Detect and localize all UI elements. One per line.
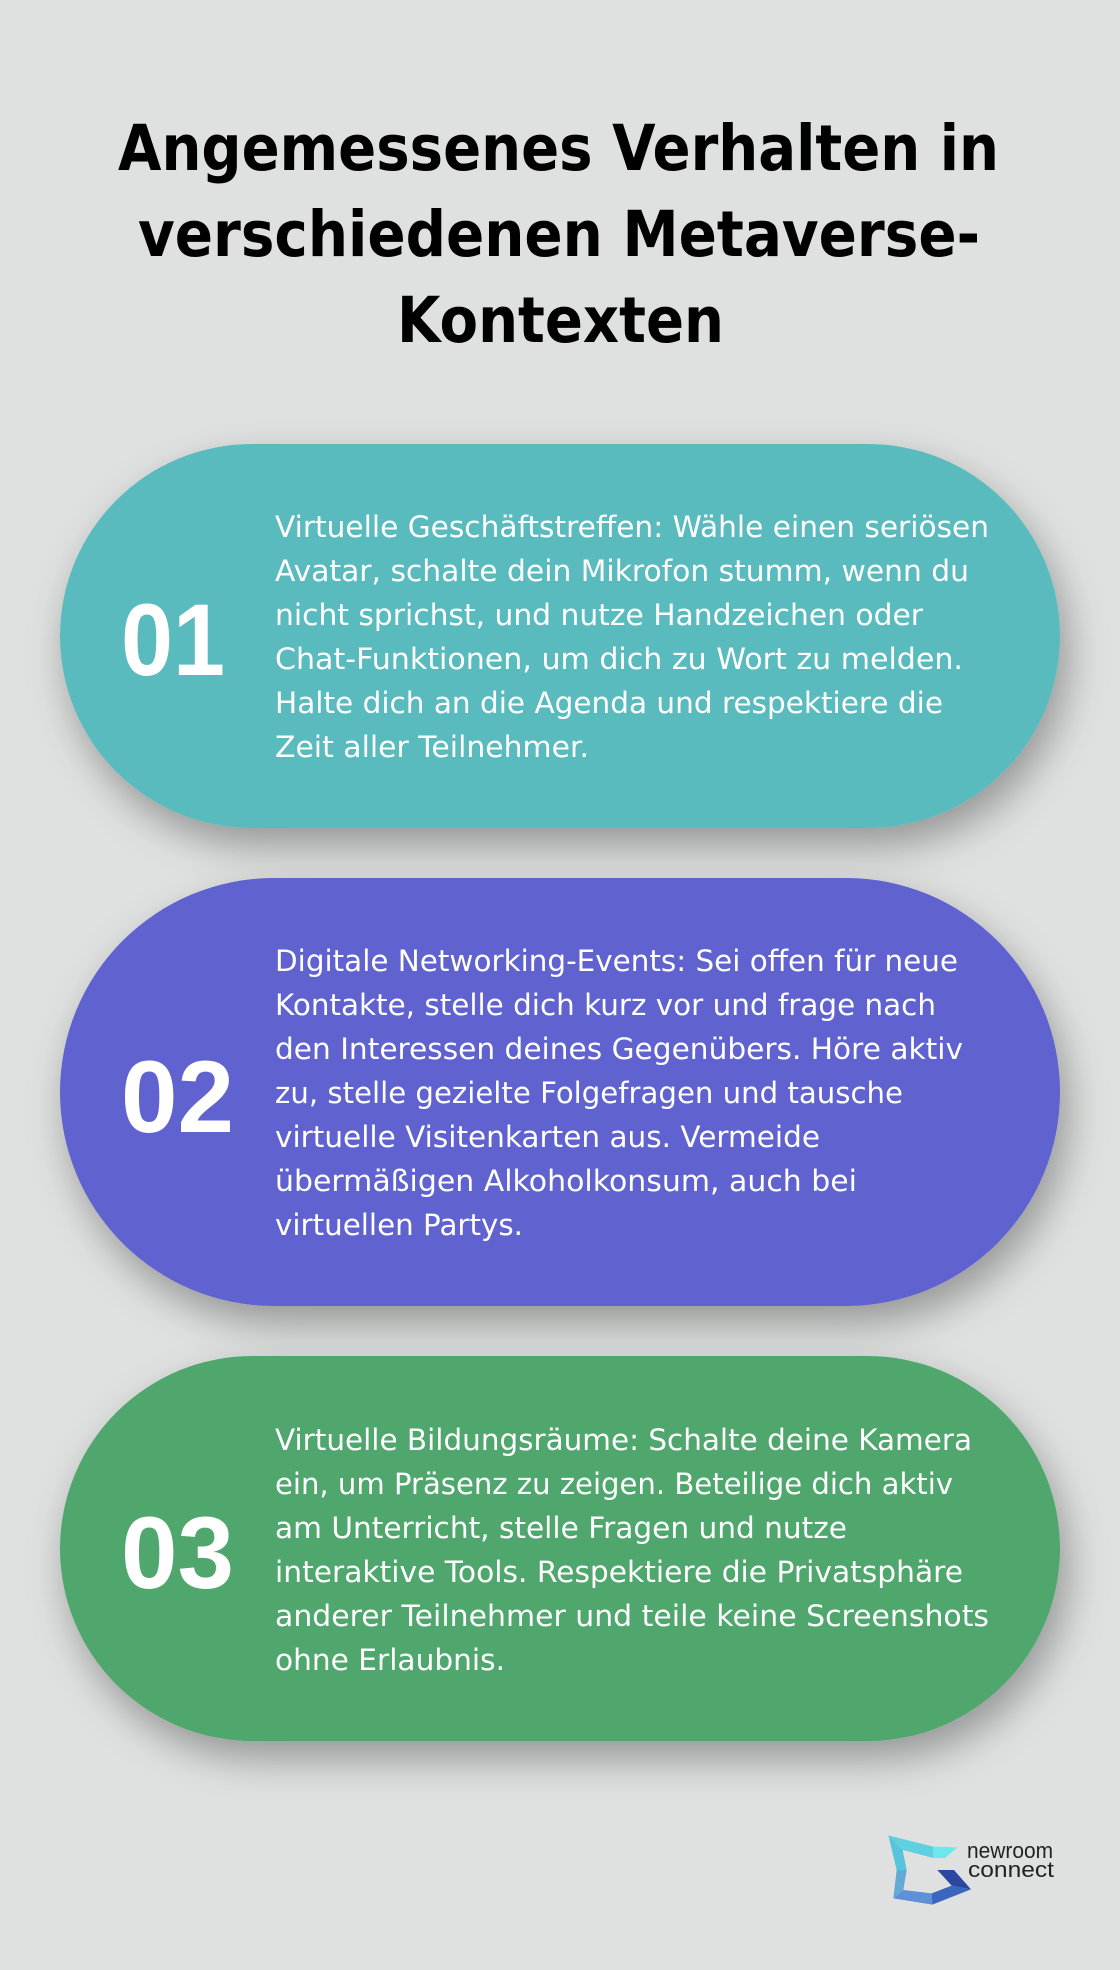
- number 01: 01: [121, 583, 225, 697]
- title: Angemessenes Verhalten in: [118, 112, 999, 185]
- text block 02: den Interessen deines Gegenübers. Höre aktiv: [275, 1032, 963, 1066]
- pill background 01: [60, 444, 1060, 828]
- text block 03: [275, 1423, 989, 1677]
- pill background 02: [60, 878, 1060, 1306]
- text block 02: Kontakte, stelle dich kurz vor und frage nach: [275, 988, 936, 1022]
- text block 02: übermäßigen Alkoholkonsum, auch bei: [275, 1164, 857, 1198]
- text block 03: Virtuelle Bildungsräume: Schalte deine Kamera: [275, 1423, 972, 1457]
- logo wordmark: [967, 1838, 1054, 1882]
- text block 02: virtuellen Partys.: [275, 1208, 523, 1242]
- panel: step 01: [60, 444, 1060, 828]
- text block 01: Zeit aller Teilnehmer.: [275, 730, 589, 764]
- panel: step 03: [60, 1356, 1060, 1741]
- title: verschiedenen Metaverse-: [138, 198, 980, 271]
- text block 01: nicht sprichst, und nutze Handzeichen oder: [275, 598, 923, 632]
- number 02: 02: [121, 1040, 234, 1154]
- logo: newroom connect: [888, 1835, 1054, 1905]
- text block 02: virtuelle Visitenkarten aus. Vermeide: [275, 1120, 820, 1154]
- text block 01: Virtuelle Geschäftstreffen: Wähle einen seriösen: [275, 510, 989, 544]
- text block 02: [275, 944, 963, 1242]
- text block 03: ein, um Präsenz zu zeigen. Beteilige dich aktiv: [275, 1467, 953, 1501]
- pill background 03: [60, 1356, 1060, 1741]
- text block 01: Halte dich an die Agenda und respektiere die: [275, 686, 943, 720]
- panel: step 02: [60, 878, 1060, 1306]
- text block 02: zu, stelle gezielte Folgefragen und tausche: [275, 1076, 903, 1110]
- text block 02: Digitale Networking-Events: Sei offen für neue: [275, 944, 958, 978]
- text block 01: Avatar, schalte dein Mikrofon stumm, wenn du: [275, 554, 969, 588]
- text block 03: ohne Erlaubnis.: [275, 1643, 505, 1677]
- title: Kontexten: [397, 284, 724, 357]
- text block 03: interaktive Tools. Respektiere die Privatsphäre: [275, 1555, 963, 1589]
- text block 03: am Unterricht, stelle Fragen und nutze: [275, 1511, 847, 1545]
- text block 01: [275, 510, 989, 764]
- logo wordmark: connect: [968, 1857, 1054, 1882]
- number 03: 03: [121, 1496, 234, 1610]
- text block 01: Chat-Funktionen, um dich zu Wort zu melden.: [275, 642, 963, 676]
- text block 03: anderer Teilnehmer und teile keine Screenshots: [275, 1599, 989, 1633]
- logo wordmark: newroom: [967, 1838, 1053, 1863]
- title: [118, 112, 999, 357]
- icon: logo mark: [888, 1835, 971, 1905]
